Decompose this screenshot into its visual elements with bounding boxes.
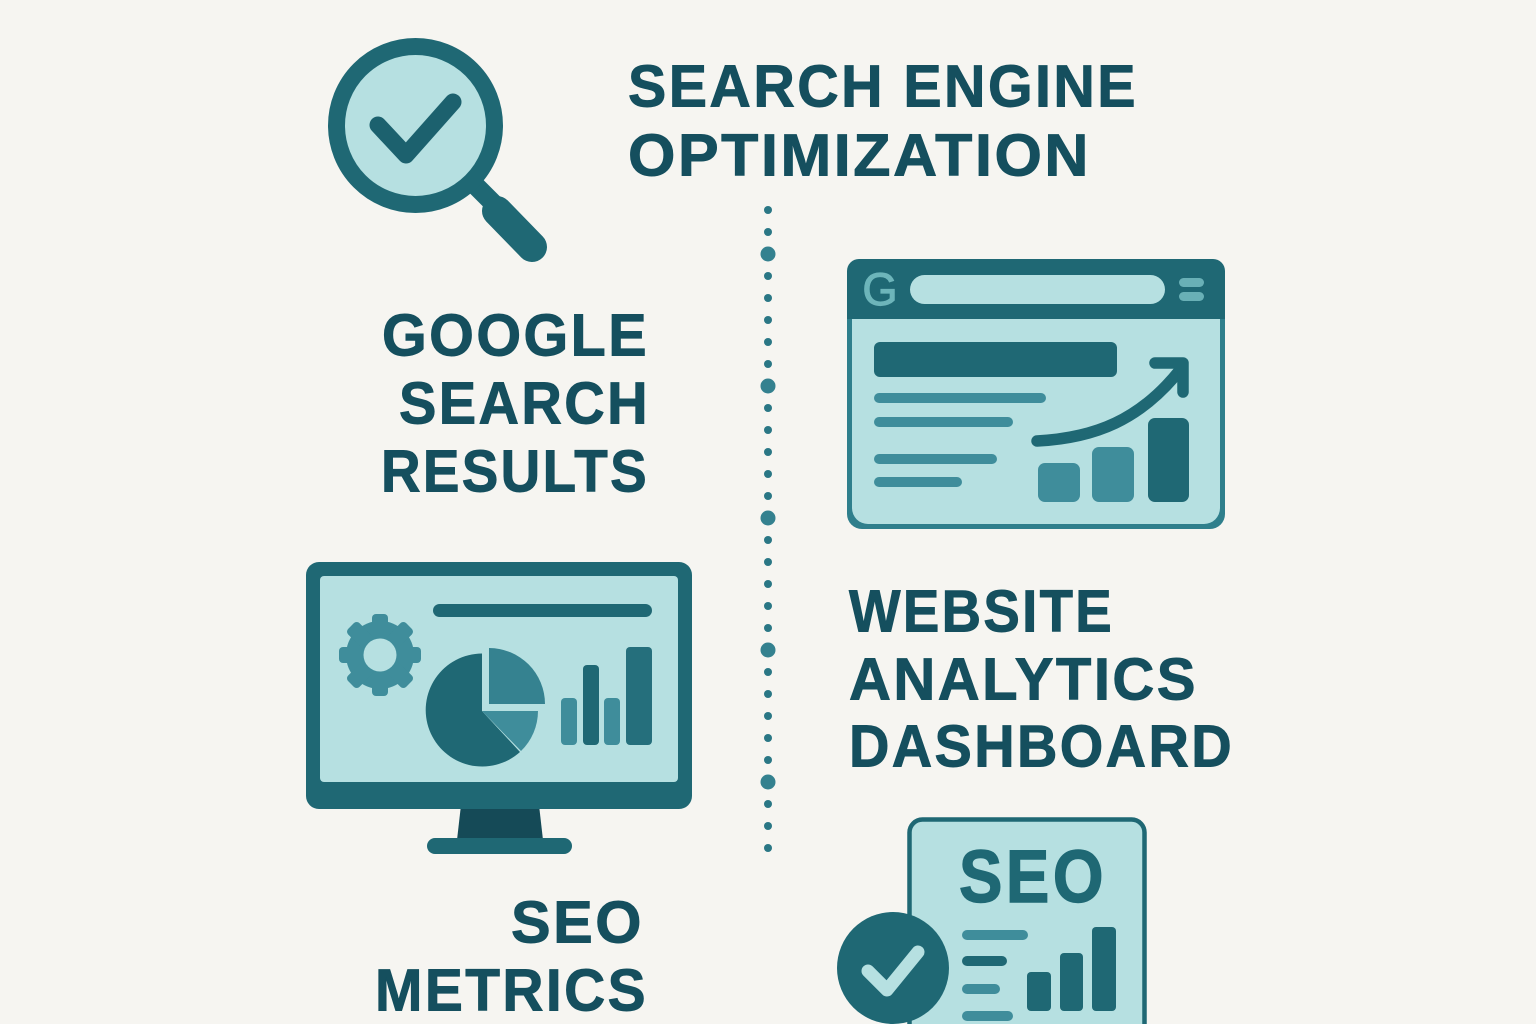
dotted vertical divider (760, 206, 776, 852)
heading: SEO Metrics (375, 890, 648, 1024)
SEO label: SEO (959, 835, 1107, 918)
heading: Website Analytics Dashboard (849, 578, 1234, 780)
pie chart (426, 648, 545, 766)
heading: Search Engine Optimization (628, 54, 1138, 188)
icon: desktop monitor analytics dashboard (306, 562, 692, 854)
result text lines (874, 393, 1046, 487)
icon: Google G logo: G (862, 264, 898, 315)
check badge (837, 912, 949, 1024)
heading: Google Search Results: SEARCH (399, 370, 650, 436)
icon: magnifying glass with check mark (336, 46, 532, 247)
heading: Website Analytics Dashboard: DASHBOARD (849, 714, 1234, 780)
heading: Search Engine Optimization: OPTIMIZATION (628, 122, 1091, 188)
heading: Google Search Results: GOOGLE (382, 302, 649, 368)
icon: browser window with search results and growth chart (847, 259, 1225, 529)
icon: gear (339, 614, 421, 696)
heading: Website Analytics Dashboard: WEBSITE (849, 578, 1114, 644)
menu icon (1179, 278, 1204, 301)
report text lines (962, 930, 1028, 1021)
heading: Google Search Results: RESULTS (381, 438, 649, 504)
heading: Google Search Results (381, 302, 650, 504)
search bar (910, 275, 1165, 304)
heading: Search Engine Optimization: SEARCH ENGINE (628, 54, 1138, 120)
result title bar (874, 342, 1117, 377)
bar chart (1038, 418, 1189, 502)
bar chart (561, 647, 652, 745)
heading: SEO Metrics: SEO (511, 890, 644, 956)
growth arrow (1037, 363, 1183, 441)
icon: SEO report document with check badge (837, 820, 1144, 1024)
heading: Website Analytics Dashboard: ANALYTICS (849, 646, 1198, 712)
monitor stand (457, 805, 543, 840)
heading: SEO Metrics: METRICS (375, 958, 648, 1024)
bar chart (1027, 927, 1116, 1011)
